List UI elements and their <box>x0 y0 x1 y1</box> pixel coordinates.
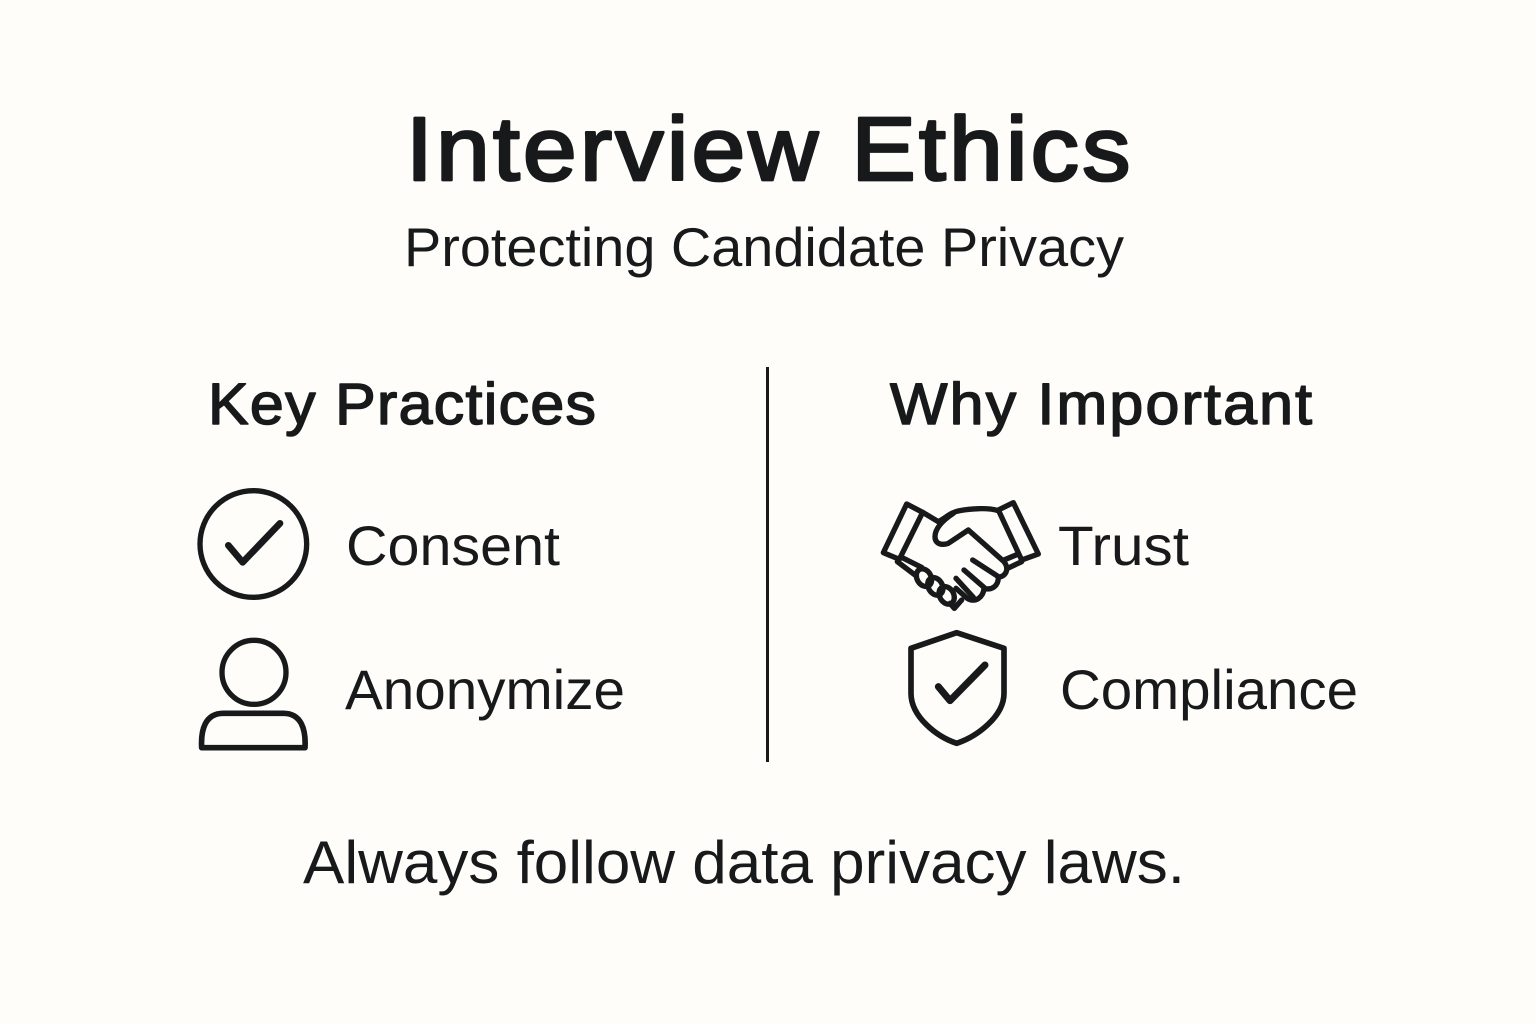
heading: why important: Why Important <box>890 371 1313 437</box>
icon: check circle <box>200 491 307 597</box>
icon: person <box>202 640 305 748</box>
icon: handshake <box>883 503 1038 608</box>
label: anonymize: Anonymize <box>345 658 625 721</box>
panel: key practices <box>200 371 625 748</box>
divider <box>766 367 769 762</box>
label: consent: Consent <box>346 514 560 577</box>
heading: key practices: Key Practices <box>208 371 596 437</box>
icon: shield check <box>911 633 1004 743</box>
footer statement: Always follow data privacy laws. <box>303 829 1185 896</box>
label: trust: Trust <box>1058 514 1189 577</box>
label: compliance: Compliance <box>1060 658 1358 721</box>
title: Interview Ethics <box>406 99 1130 199</box>
panel: why important <box>883 371 1358 743</box>
subtitle: Protecting Candidate Privacy <box>404 216 1124 278</box>
